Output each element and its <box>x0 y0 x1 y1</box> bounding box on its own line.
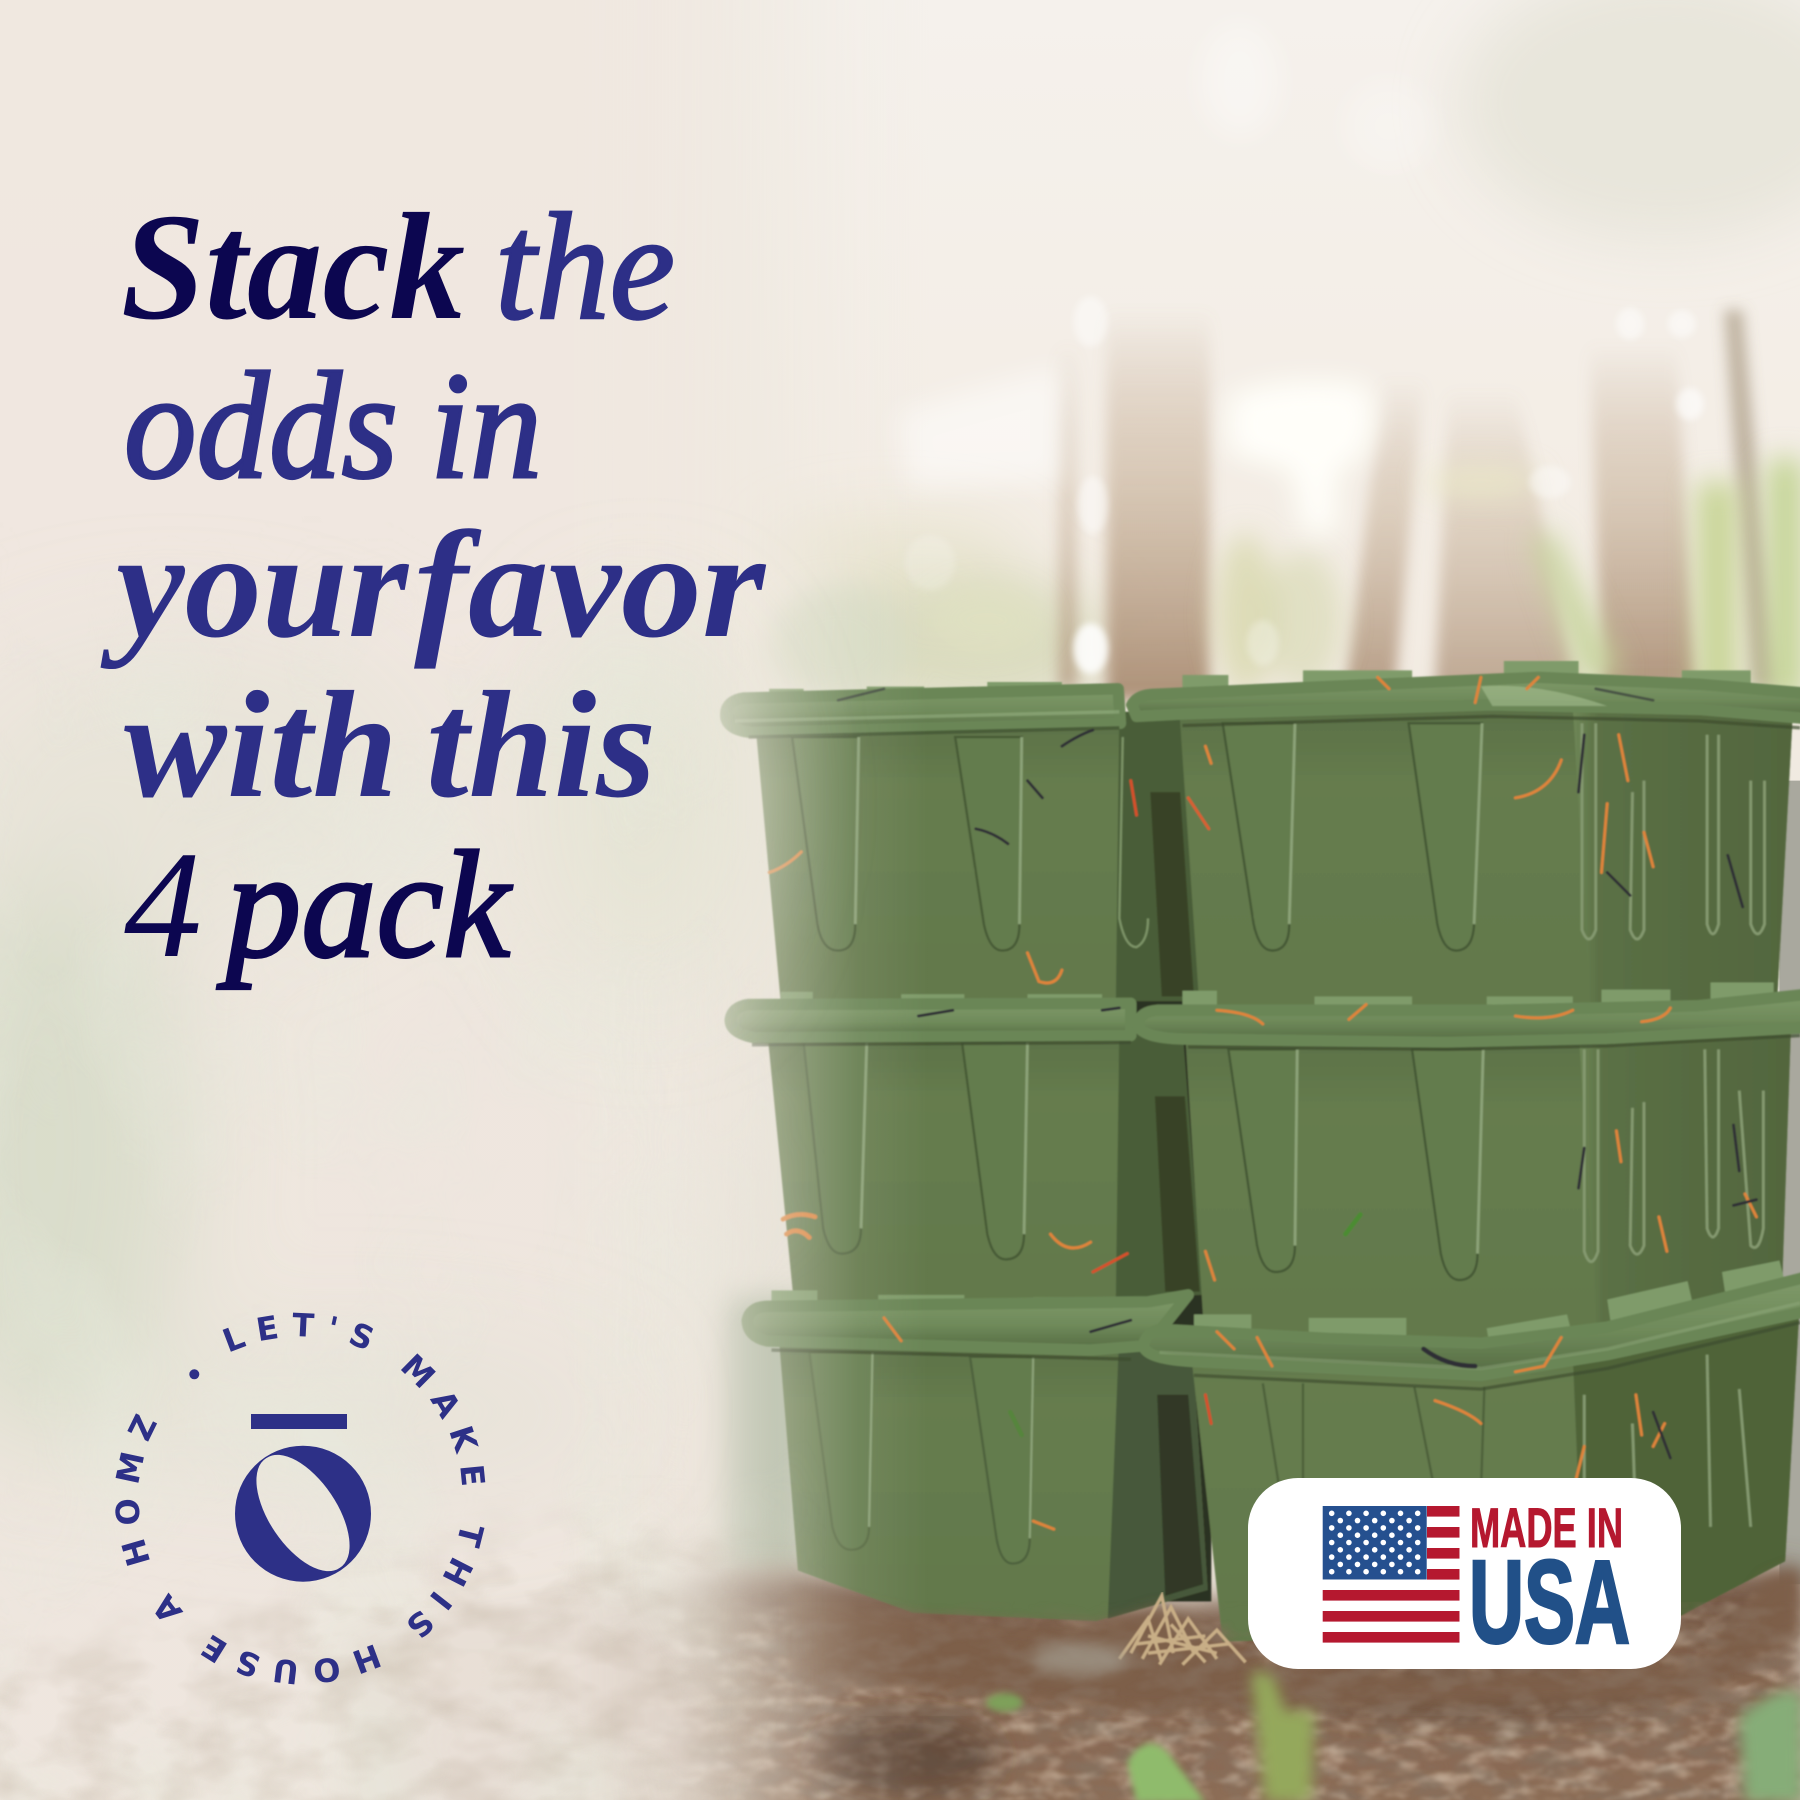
line 4: with this: with <box>124 661 398 830</box>
stacked green crates <box>726 661 1800 1642</box>
foreground plants <box>986 1672 1800 1800</box>
made in text: MADE IN <box>1470 1496 1623 1559</box>
faded soil under fog <box>0 1535 722 1800</box>
line 1: Stack the: the <box>495 183 675 352</box>
made in usa badge <box>1248 1478 1681 1669</box>
plastic marbling streaks <box>769 677 1756 1529</box>
line 2: odds in: odds <box>124 342 398 511</box>
american flag <box>1323 1506 1460 1643</box>
crate: right middle <box>1138 983 1800 1355</box>
fog tint <box>0 620 746 1481</box>
crate: left middle <box>730 992 1203 1309</box>
macron bar <box>251 1414 347 1429</box>
lid <box>781 992 1102 1008</box>
usa text: USA <box>1469 1537 1630 1669</box>
crates shadow behind <box>723 1297 804 1573</box>
gap between stacks <box>1119 718 1211 1601</box>
fog mottling <box>698 1586 730 1689</box>
dirt over crate bases <box>792 1567 1800 1716</box>
green foliage <box>769 459 1800 700</box>
ground: forest soil <box>344 1567 1800 1800</box>
crate: left bottom <box>747 1290 1208 1621</box>
headline <box>100 183 767 990</box>
crate: left top <box>726 682 1200 1001</box>
lid <box>1182 661 1751 693</box>
dry grass tuft <box>1119 1596 1246 1665</box>
lid <box>1182 983 1774 1010</box>
line 1: Stack the <box>121 183 675 352</box>
line 3: your favor <box>100 501 767 670</box>
line 5: 4 pack: pack <box>217 821 513 990</box>
line 1: Stack the: Stack <box>121 183 465 352</box>
circular tagline: LET'S MAKE THIS HOUSE A HOMZ <box>115 1312 486 1684</box>
line 2: odds in: in <box>430 342 542 511</box>
tree trunks <box>1058 310 1777 700</box>
line 4: with this: this <box>426 661 656 830</box>
lid <box>1194 1314 1406 1339</box>
lid <box>771 1290 1096 1309</box>
line 2: odds in <box>124 342 542 511</box>
logo badge: Let's make this house a Homz <box>115 1312 486 1684</box>
line 4: with this <box>124 661 656 830</box>
line 3: your favor: favor <box>414 501 767 670</box>
sun glare <box>895 367 1374 534</box>
crate: right top <box>1132 661 1800 1010</box>
lid <box>769 682 1062 703</box>
line 5: 4 pack: 4 <box>124 821 202 990</box>
crate: right bottom <box>1143 1261 1800 1642</box>
letter o <box>235 1446 371 1582</box>
line 3: your favor: your <box>100 501 409 670</box>
